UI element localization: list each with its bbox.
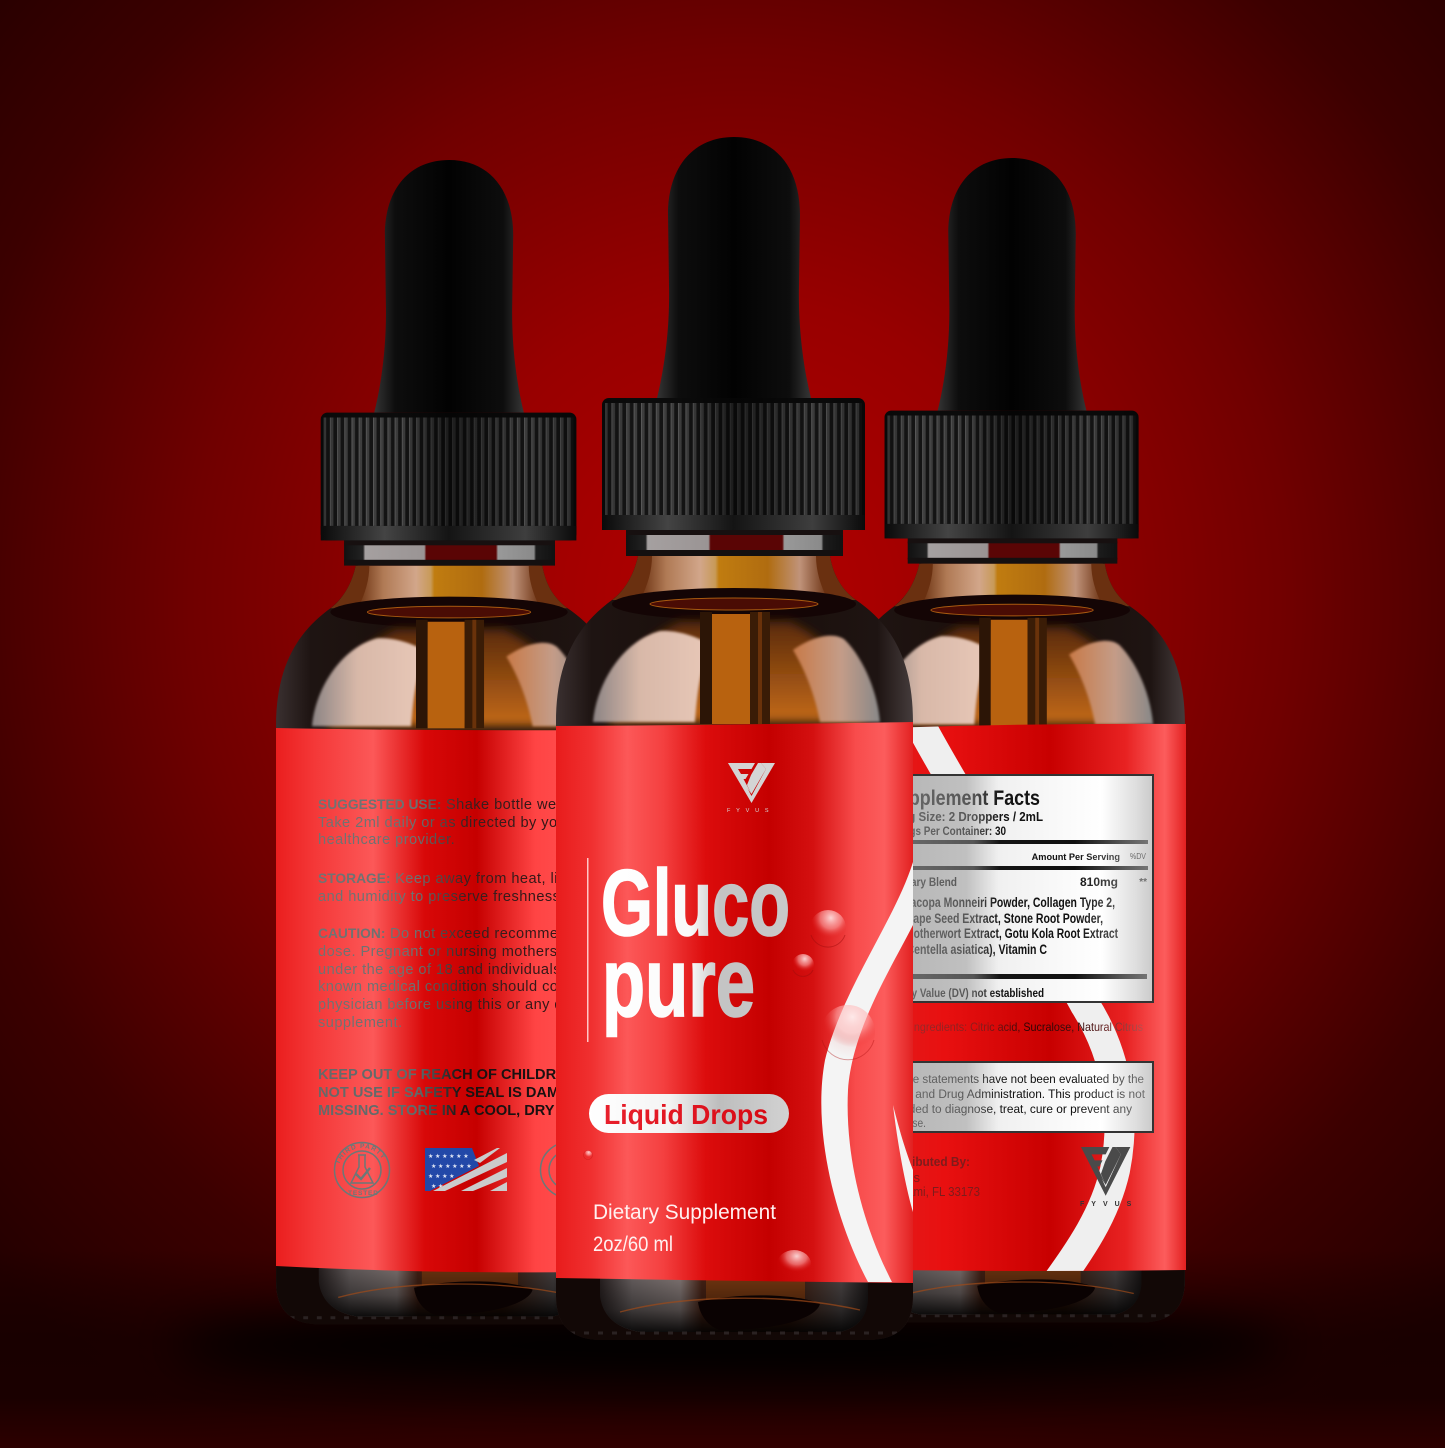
logo: fyvus light: FYVUS — [727, 808, 774, 814]
supplement facts panel: 810mg — [1080, 875, 1118, 889]
supplement facts panel: ** Daily Value (DV) not established — [883, 986, 1044, 1000]
badge: liquid drops — [589, 1094, 789, 1133]
logo: fyvus dark: FYVUS — [1080, 1201, 1138, 1208]
icon: good manufacturing seal — [540, 1142, 596, 1198]
left label directions text: physician before using this or any dietary — [318, 997, 602, 1013]
fda disclaimer panel: Food and Drug Administration. This product is not — [885, 1087, 1146, 1101]
fda disclaimer panel: disease. — [888, 1116, 926, 1130]
right collar — [908, 538, 1117, 564]
center collar — [626, 530, 843, 556]
left label directions text: CAUTION: Do not exceed recommended — [318, 926, 593, 942]
water droplets — [584, 910, 875, 1278]
swoosh — [821, 862, 913, 1282]
logo: fyvus dark — [1080, 1147, 1138, 1208]
product descriptor text: 2oz/60 ml — [593, 1233, 673, 1256]
right dropper bulb — [938, 158, 1086, 411]
distributor text: Miami, FL 33173 — [895, 1184, 980, 1199]
left glass body — [276, 566, 623, 1326]
distributor text: Fyvus — [885, 1170, 920, 1185]
badge: liquid drops: Liquid Drops — [604, 1099, 768, 1130]
center glass body — [556, 556, 913, 1342]
left label directions text: MISSING. STORE IN A COOL, DRY PLACE. — [318, 1103, 612, 1119]
center bottle — [555, 137, 914, 1342]
distributor text: Distributed By: — [885, 1154, 970, 1169]
supplement facts panel: Proprietary Blend — [872, 875, 957, 889]
icon: third party tested seal: TESTED — [348, 1190, 379, 1197]
supplement facts panel: Motherwort Extract, Gotu Kola Root Extract — [905, 926, 1118, 941]
left label directions text: KEEP OUT OF REACH OF CHILDREN. DO — [318, 1067, 606, 1083]
floor shadow — [0, 1250, 1445, 1448]
icon: american flag: ★ ★ ★ ★ ★ ★ — [431, 1163, 472, 1170]
icon: american flag — [425, 1148, 507, 1191]
swoosh sliver — [893, 1105, 913, 1212]
right cap — [885, 411, 1139, 538]
supplement facts panel: %DV — [1130, 852, 1147, 861]
left label directions text: NOT USE IF SAFETY SEAL IS DAMAGED OR — [318, 1085, 628, 1101]
left label directions text: under the age of 18 and individuals with — [318, 962, 593, 978]
left bottle — [276, 160, 628, 1324]
left cap — [321, 413, 576, 540]
supplement facts panel: Amount Per Serving — [1032, 852, 1120, 862]
icon: third party tested seal — [334, 1142, 390, 1198]
icon: american flag: ★ ★ ★ ★ ★ ★ — [428, 1153, 469, 1160]
center cap — [602, 398, 865, 530]
title: gluco pure: Gluco — [601, 850, 790, 955]
title: gluco pure: pure — [602, 927, 755, 1037]
left label directions text — [318, 797, 628, 1119]
center dropper bulb — [657, 137, 811, 398]
supplement facts panel: Bacopa Monneiri Powder, Collagen Type 2, — [903, 895, 1115, 910]
right bottle — [878, 158, 1186, 1322]
logo: fyvus light — [727, 763, 775, 814]
right glass body — [840, 564, 1185, 1324]
supplement facts panel: Supplement Facts — [886, 787, 1040, 810]
left label — [276, 728, 600, 1272]
left label directions text: dose. Pregnant or nursing mothers, — [318, 944, 562, 960]
product descriptor text: Dietary Supplement — [593, 1201, 776, 1224]
left label directions text: STORAGE: Keep away from heat, light — [318, 871, 580, 887]
left collar — [344, 540, 555, 566]
supplement facts panel: Servings Per Container: 30 — [879, 824, 1006, 838]
fda disclaimer panel: intended to diagnose, treat, cure or prevent any — [883, 1102, 1133, 1116]
left label directions text: known medical condition should consult — [318, 979, 591, 995]
icon: third party tested seal: THIRD PARTY — [336, 1144, 385, 1164]
title divider — [587, 858, 588, 1042]
center label — [555, 720, 914, 1285]
left label directions text: and humidity to preserve freshness. — [318, 889, 565, 905]
supplement facts panel: (Centella asiatica), Vitamin C — [903, 942, 1047, 957]
left label directions text: supplement. — [318, 1015, 402, 1031]
icon: american flag: ★ ★ — [431, 1183, 443, 1190]
left label directions text: SUGGESTED USE: Shake bottle well. — [318, 797, 568, 813]
title: gluco pure — [601, 850, 790, 1037]
supplement facts panel: ** — [1139, 877, 1147, 888]
supplement facts panel: Grape Seed Extract, Stone Root Powder, — [901, 911, 1103, 926]
distributor text — [885, 1154, 980, 1199]
other ingredients text: Other Ingredients: Citric acid, Sucralose, Natural Citrus — [881, 1020, 1143, 1034]
fda disclaimer panel: These statements have not been evaluated by the — [887, 1072, 1144, 1086]
left dropper bulb — [374, 160, 524, 413]
product descriptor text — [593, 1201, 776, 1256]
right label — [913, 724, 1186, 1271]
icon: american flag: ★ ★ ★ ★ — [428, 1173, 455, 1180]
left label directions text: healthcare provider. — [318, 832, 455, 848]
supplement facts panel — [872, 775, 1153, 1002]
left label directions text: Take 2ml daily or as directed by your — [318, 815, 572, 831]
supplement facts panel: Serving Size: 2 Droppers / 2mL — [873, 810, 1043, 824]
fda disclaimer panel — [880, 1062, 1153, 1132]
